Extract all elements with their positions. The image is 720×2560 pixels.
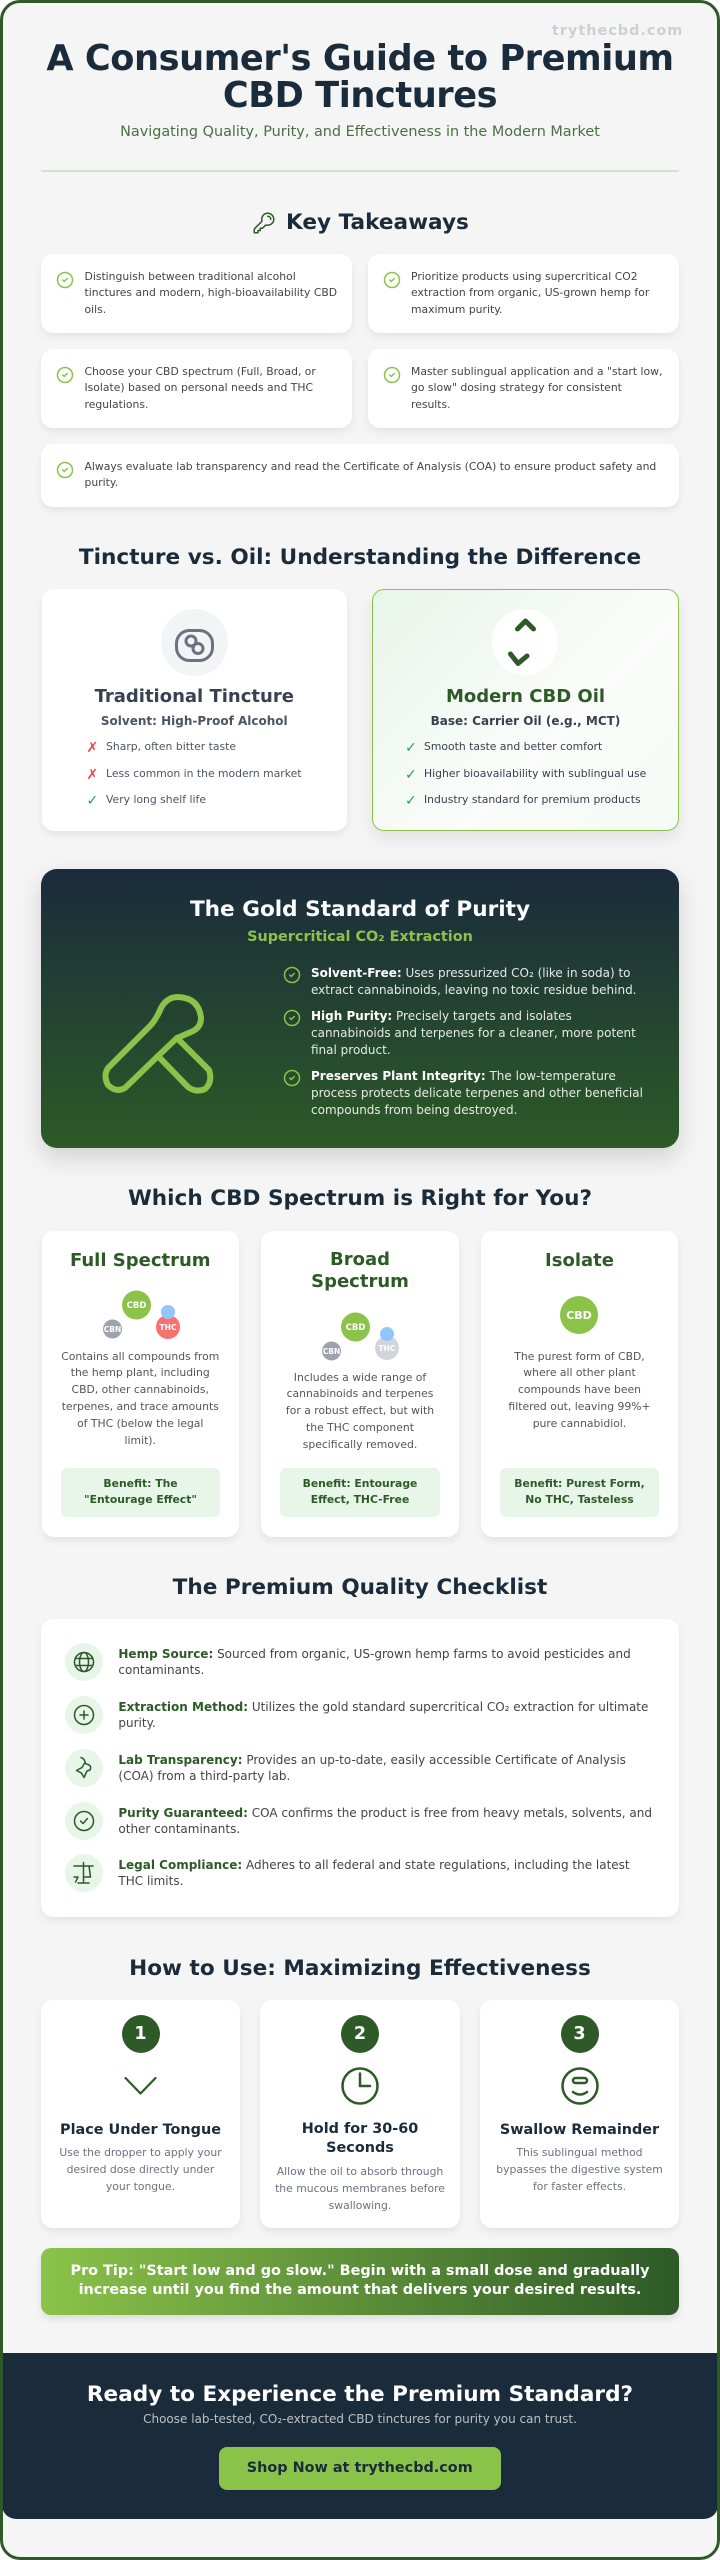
icon: check	[56, 366, 74, 384]
description: specifically removed.	[303, 1438, 417, 1451]
benefit text: final product.	[311, 1043, 391, 1057]
benefit text: Preserves Plant Integrity: The low-temperature	[311, 1069, 616, 1083]
item text: Extraction Method: Utilizes the gold standard supercritical CO₂ extraction for ultimate	[118, 1700, 648, 1714]
benefit box	[500, 1468, 659, 1517]
card subtitle: Solvent: High-Proof Alcohol	[101, 714, 288, 728]
icon: check	[56, 462, 74, 478]
description: terpenes, and trace amounts	[62, 1400, 219, 1413]
takeaway text: purity.	[84, 476, 118, 489]
checklist item: legal	[65, 1854, 665, 1892]
step title	[260, 2120, 460, 2159]
item: Less common in the modern market	[106, 766, 302, 780]
benefit box: Benefit: Purest Form,	[514, 1476, 645, 1490]
item text: Purity Guaranteed: COA confirms the product is free from heavy metals, solvents, and	[118, 1806, 652, 1820]
icon: face	[560, 2067, 598, 2105]
benefit text: Solvent-Free: Uses pressurized CO₂ (like in soda) to	[311, 966, 630, 980]
card title: Spectrum	[311, 1271, 409, 1292]
item text: Legal Compliance: Adheres to all federal and state regulations, including the latest	[118, 1858, 630, 1872]
item text	[118, 1646, 631, 1679]
description: Includes a wide range of	[294, 1371, 426, 1384]
item text	[118, 1698, 648, 1732]
takeaway text: Prioritize products using supercritical CO2	[411, 270, 638, 283]
icon: check	[284, 1070, 300, 1086]
step title: Seconds	[326, 2140, 394, 2156]
step number: 2	[354, 2024, 366, 2044]
button: Shop Now at trythecbd.com	[247, 2460, 473, 2476]
footer call to action	[2, 2353, 718, 2519]
benefit text: process protects delicate terpenes and other beneficial	[311, 1086, 643, 1100]
benefit box: Effect, THC-Free	[311, 1493, 409, 1506]
step number	[122, 2014, 160, 2052]
description: CBD, other cannabinoids,	[72, 1383, 209, 1396]
description: the THC component	[306, 1421, 414, 1434]
benefit: high purity	[284, 1009, 636, 1057]
watermark: trythecbd.com	[552, 23, 683, 39]
pro tip: Pro Tip: "Start low and go slow." Begin with a small dose and gradually	[71, 2263, 649, 2279]
takeaway card 4	[368, 349, 679, 428]
heading: key takeaways	[254, 210, 469, 235]
molecule diagram: CBN	[103, 1325, 121, 1334]
card title: Isolate	[545, 1250, 614, 1271]
pro tip: increase until you find the amount that delivers your desired results.	[79, 2282, 641, 2298]
icon: key	[254, 212, 274, 234]
description	[481, 1349, 678, 1433]
takeaway text: Choose your CBD spectrum (Full, Broad, or	[84, 365, 316, 378]
panel: broad spectrum	[261, 1231, 459, 1537]
molecule diagram: CBD	[346, 1323, 365, 1333]
panel subtitle: Supercritical CO₂ Extraction	[247, 929, 473, 945]
icon: scales	[65, 1854, 103, 1892]
step title: Hold for 30-60	[302, 2121, 418, 2137]
icon: tincture circle	[160, 609, 228, 676]
description: pure cannabidiol.	[533, 1417, 626, 1430]
item: ✓	[405, 766, 417, 782]
step 2	[260, 2000, 460, 2228]
molecule diagram: CBN	[323, 1347, 340, 1356]
takeaway text	[84, 365, 316, 411]
benefits list	[284, 966, 643, 1117]
subtitle: Navigating Quality, Purity, and Effectiveness in the Modern Market	[120, 124, 600, 140]
benefit text: cannabinoids and terpenes for a cleaner, more potent	[311, 1026, 636, 1040]
benefit: solvent-free	[284, 966, 636, 997]
checklist item: lab	[65, 1749, 665, 1787]
item text	[118, 1752, 626, 1785]
benefit box: Benefit: The	[103, 1476, 178, 1490]
takeaway text	[84, 270, 337, 316]
icon: check	[284, 1010, 300, 1026]
description: limit).	[125, 1434, 156, 1447]
benefit text: extract cannabinoids, leaving no toxic residue behind.	[311, 983, 636, 997]
panel title: The Gold Standard of Purity	[190, 897, 530, 922]
item: Very long shelf life	[106, 793, 206, 806]
item: ✓	[405, 740, 417, 756]
panel: full spectrum	[42, 1231, 239, 1537]
icon glyph	[508, 618, 536, 666]
step 3	[480, 2000, 679, 2228]
takeaway text: results.	[411, 398, 451, 411]
icon glyph	[175, 629, 214, 662]
benefit box	[61, 1468, 220, 1517]
item text	[118, 1856, 630, 1890]
description	[286, 1371, 434, 1451]
takeaway text: Always evaluate lab transparency and read the Certificate of Analysis (COA) to ensure product safety and	[84, 460, 656, 473]
heading text: Key Takeaways	[286, 210, 469, 235]
takeaway text	[84, 460, 656, 489]
step text: the mucous membranes before	[275, 2182, 445, 2195]
item: ✓	[86, 793, 98, 809]
takeaway card 2	[368, 254, 679, 333]
takeaway text: Isolate) based on personal needs and THC	[84, 381, 313, 394]
description: filtered out, leaving 99%+	[508, 1400, 651, 1413]
item: Higher bioavailability with sublingual use	[424, 766, 646, 780]
card subtitle: Base: Carrier Oil (e.g., MCT)	[431, 714, 620, 728]
item text	[118, 1804, 652, 1838]
benefit text: compounds from being destroyed.	[311, 1103, 517, 1117]
benefit box: "Entourage Effect"	[84, 1493, 197, 1506]
card title	[311, 1249, 409, 1292]
takeaway text: oils.	[84, 303, 106, 316]
description: where all other plant	[523, 1366, 636, 1379]
benefit: plant integrity	[284, 1069, 643, 1117]
item: Sharp, often bitter taste	[106, 740, 236, 753]
icon: chevron	[124, 2076, 157, 2096]
footer subtitle: Choose lab-tested, CO₂-extracted CBD tinctures for purity you can trust.	[143, 2412, 577, 2426]
step 1	[41, 2000, 240, 2228]
list	[405, 740, 646, 809]
item: ✗	[86, 766, 98, 782]
step title: Place Under Tongue	[60, 2122, 221, 2138]
step text: desired dose directly under	[67, 2163, 214, 2176]
takeaway text	[411, 270, 650, 316]
takeaway text: Distinguish between traditional alcohol	[84, 270, 296, 283]
card title: Broad	[330, 1249, 390, 1270]
step text	[260, 2163, 460, 2214]
step title: Swallow Remainder	[500, 2122, 659, 2138]
molecule diagram: CBD	[126, 1301, 146, 1311]
icon: lab	[65, 1749, 103, 1787]
benefit text	[311, 1069, 643, 1117]
panel: checklist	[41, 1619, 679, 1917]
molecule diagram	[560, 1296, 598, 1334]
icon: clock	[341, 2067, 379, 2105]
takeaway text: regulations.	[84, 398, 148, 411]
molecule diagram: CBD	[566, 1309, 592, 1322]
heading: checklist: The Premium Quality Checklist	[173, 1575, 547, 1600]
icon: check	[56, 272, 74, 288]
icon: globe	[65, 1643, 103, 1681]
heading: how to use: How to Use: Maximizing Effectiveness	[129, 1956, 591, 1981]
description	[61, 1350, 219, 1447]
panel: traditional tincture	[42, 589, 347, 831]
takeaway text: go slow" dosing strategy for consistent	[411, 381, 622, 394]
title: A Consumer's Guide to Premium	[46, 38, 674, 79]
benefit box	[280, 1468, 440, 1517]
molecule diagram: THC	[159, 1323, 176, 1332]
icon: plus circle	[65, 1696, 103, 1734]
benefit text	[311, 1009, 636, 1057]
step number	[560, 2014, 598, 2052]
step text	[41, 2144, 240, 2195]
list	[86, 740, 302, 809]
icon: check	[384, 366, 400, 384]
icon: check	[384, 272, 400, 288]
step text: your tongue.	[106, 2180, 175, 2193]
description: the hemp plant, including	[71, 1366, 210, 1379]
item text: purity.	[118, 1716, 156, 1730]
item text: THC limits.	[118, 1874, 183, 1888]
step text: Allow the oil to absorb through	[277, 2165, 443, 2178]
step text	[480, 2144, 679, 2195]
description: of THC (below the legal	[77, 1417, 203, 1430]
panel: isolate	[481, 1231, 678, 1537]
step text: This sublingual method	[516, 2146, 643, 2159]
panel: gold standard	[41, 869, 679, 1148]
card title: Full Spectrum	[70, 1250, 211, 1271]
step text: swallowing.	[329, 2199, 391, 2212]
molecule diagram: THC	[379, 1344, 396, 1353]
panel: modern cbd oil	[372, 589, 679, 831]
item: Smooth taste and better comfort	[424, 740, 602, 753]
icon: check	[284, 966, 300, 984]
description: compounds have been	[518, 1383, 641, 1396]
molecule diagram	[103, 1290, 180, 1339]
item: Industry standard for premium products	[424, 793, 641, 806]
heading: spectrum: Which CBD Spectrum is Right for You?	[128, 1186, 592, 1211]
benefit box: Benefit: Entourage	[303, 1476, 417, 1490]
checklist item: extraction	[65, 1696, 665, 1734]
description: Contains all compounds from	[61, 1350, 219, 1363]
icon: extraction tool	[102, 994, 214, 1094]
card title: Traditional Tincture	[95, 686, 294, 707]
step text: for faster effects.	[533, 2180, 626, 2193]
description: The purest form of CBD,	[514, 1350, 645, 1363]
takeaway card 5	[41, 444, 679, 507]
button	[218, 2447, 501, 2490]
description: for a robust effect, but with	[286, 1404, 434, 1417]
title: CBD Tinctures	[223, 75, 497, 116]
title	[46, 38, 674, 116]
takeaway text: extraction from organic, US-grown hemp for	[411, 286, 649, 299]
item text: Lab Transparency: Provides an up-to-date, easily accessible Certificate of Analysis	[118, 1752, 626, 1766]
item: ✓	[405, 793, 417, 809]
item text: contaminants.	[118, 1663, 204, 1677]
benefit box: No THC, Tasteless	[525, 1493, 634, 1506]
checklist item: purity	[65, 1802, 665, 1840]
benefit text	[311, 966, 636, 997]
heading: tincture vs oil: Tincture vs. Oil: Understanding the Difference	[79, 545, 641, 570]
benefit text: High Purity: Precisely targets and isolates	[311, 1009, 572, 1023]
step text: Use the dropper to apply your	[59, 2146, 222, 2159]
step text: bypasses the digestive system	[496, 2163, 663, 2176]
footer title: Ready to Experience the Premium Standard?	[87, 2382, 633, 2407]
step number: 1	[134, 2024, 147, 2044]
icon: check circle	[65, 1802, 103, 1840]
card title: Modern CBD Oil	[446, 686, 605, 707]
takeaway text: Master sublingual application and a "start low,	[411, 365, 662, 378]
item text: (COA) from a third-party lab.	[118, 1769, 290, 1783]
item text: Hemp Source: Sourced from organic, US-grown hemp farms to avoid pesticides and	[118, 1646, 631, 1660]
takeaway text: tinctures and modern, high-bioavailability CBD	[84, 286, 337, 299]
step number: 3	[573, 2024, 586, 2044]
step number	[341, 2014, 379, 2052]
item	[86, 793, 206, 809]
item: ✗	[86, 740, 98, 756]
item text: other contaminants.	[118, 1822, 240, 1836]
takeaway card 1	[41, 254, 352, 333]
takeaway card 3	[41, 349, 352, 428]
checklist item: hemp source	[65, 1643, 665, 1681]
icon: oil circle	[492, 609, 558, 675]
takeaway text: maximum purity.	[411, 303, 502, 316]
molecule diagram	[322, 1312, 399, 1360]
takeaway text	[411, 365, 662, 411]
pro tip	[41, 2248, 679, 2315]
description: cannabinoids and terpenes	[287, 1387, 433, 1400]
